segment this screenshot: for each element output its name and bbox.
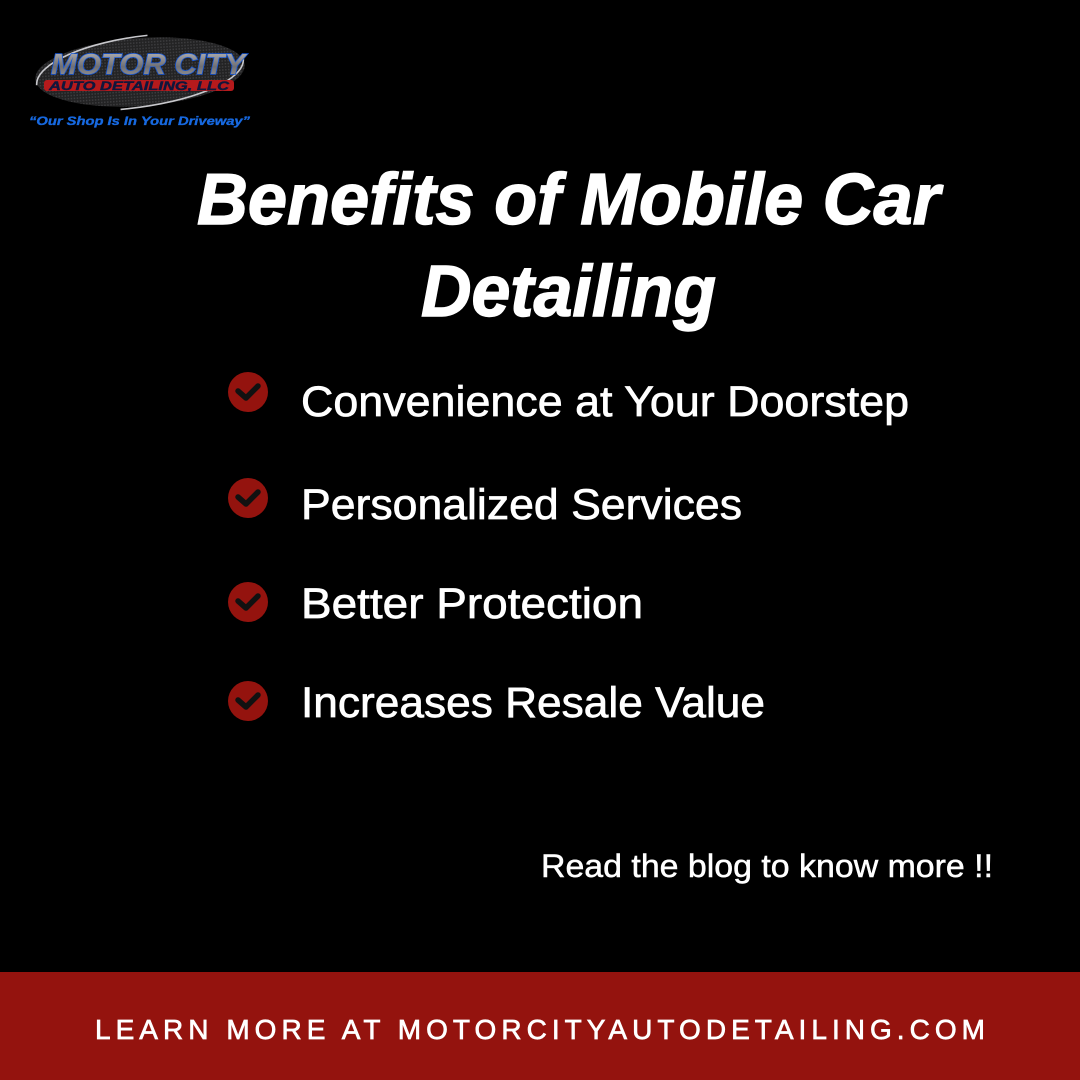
call to action text: Read the blog to know more !! bbox=[541, 848, 993, 884]
benefit text: Personalized Services bbox=[301, 481, 742, 529]
title bbox=[197, 160, 944, 332]
logo: Motor City Auto Detailing bbox=[29, 29, 250, 128]
footer text: LEARN MORE AT MOTORCITYAUTODETAILING.COM bbox=[95, 1014, 985, 1045]
benefit: Personalized Services bbox=[228, 478, 742, 529]
icon: check bbox=[228, 478, 268, 518]
benefit: Convenience at Your Doorstep bbox=[228, 372, 909, 426]
logo tagline: “Our Shop Is In Your Driveway” bbox=[29, 114, 250, 128]
benefit: Increases Resale Value bbox=[228, 679, 765, 727]
logo oval bbox=[33, 29, 247, 115]
benefit text: Convenience at Your Doorstep bbox=[301, 378, 909, 426]
benefit text: Better Protection bbox=[301, 580, 643, 628]
icon: check bbox=[228, 681, 268, 721]
icon: check bbox=[228, 372, 268, 412]
logo red banner: AUTO DETAILING, LLC bbox=[48, 79, 229, 93]
title: Benefits of Mobile Car bbox=[197, 160, 944, 240]
logo wordmark: MOTOR CITY bbox=[51, 49, 248, 81]
footer banner bbox=[0, 972, 1080, 1080]
icon: check bbox=[228, 582, 268, 622]
title: Detailing bbox=[421, 252, 716, 332]
benefit: Better Protection bbox=[228, 580, 643, 628]
logo red banner bbox=[44, 79, 234, 93]
benefit text: Increases Resale Value bbox=[301, 679, 765, 727]
